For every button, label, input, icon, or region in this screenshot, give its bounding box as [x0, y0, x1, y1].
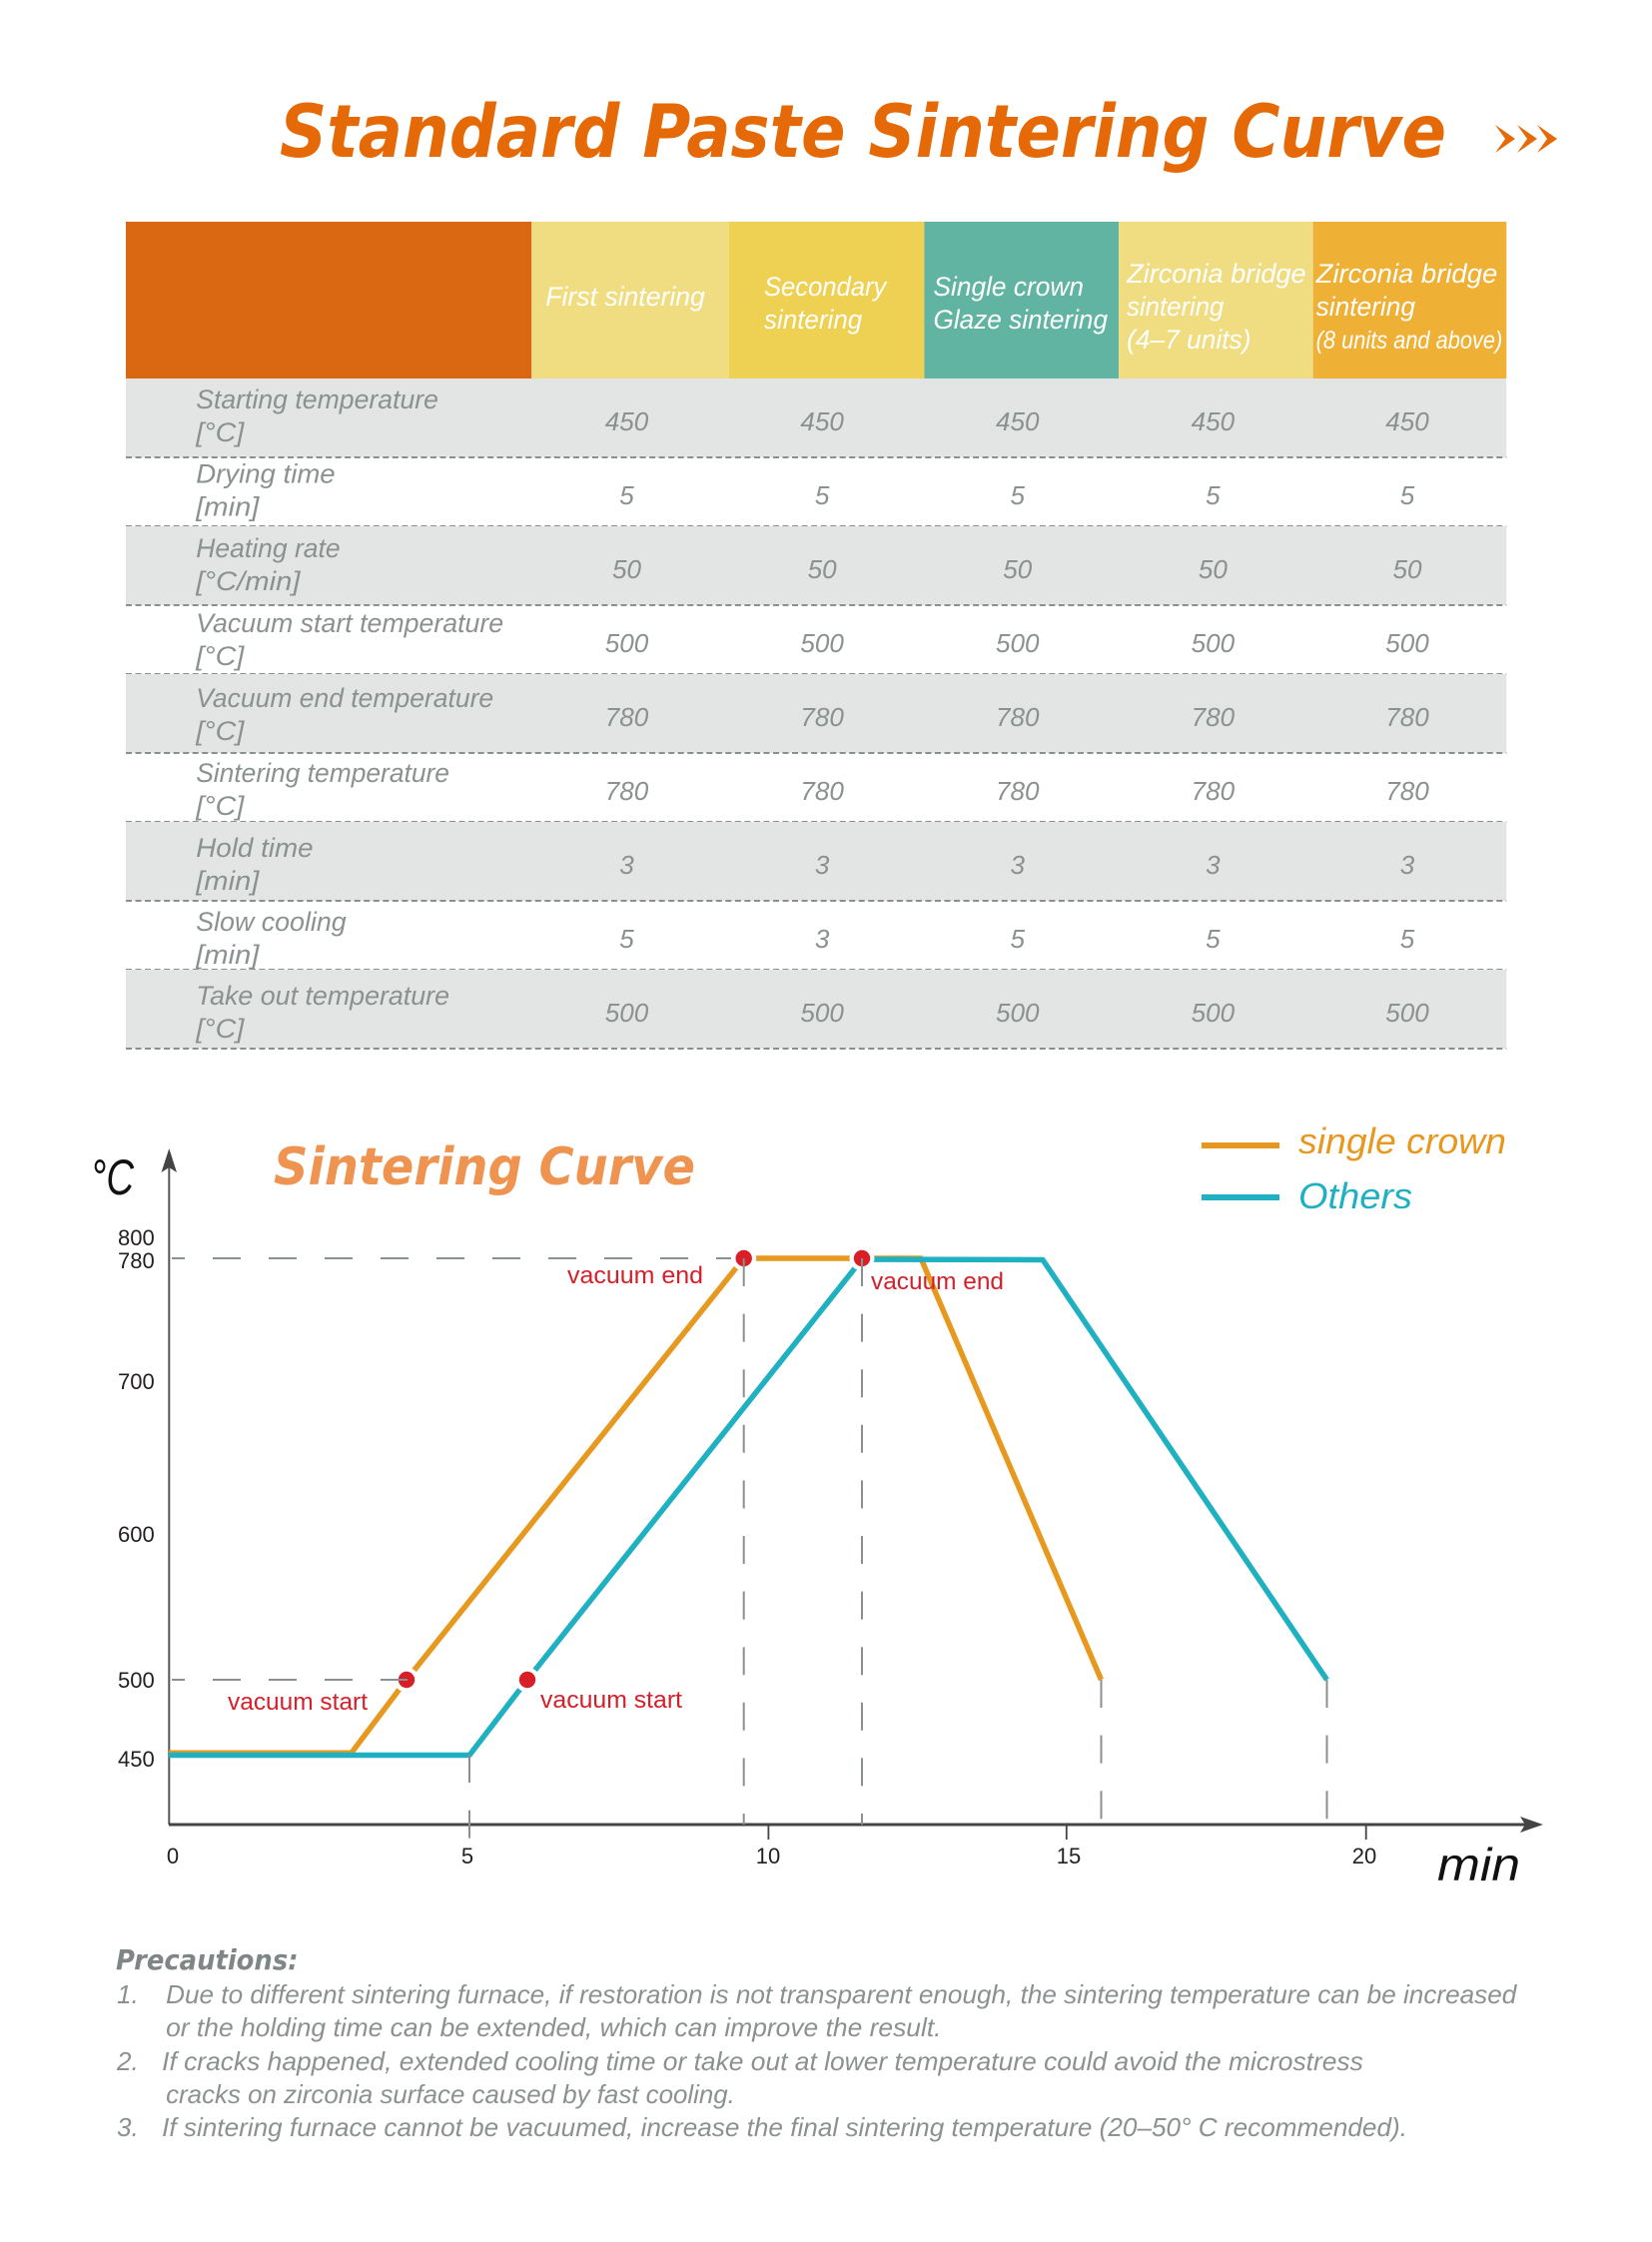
row: vacuum start temperature — [126, 608, 1506, 674]
x axis: 15 — [1057, 1844, 1081, 1868]
y axis: 500 — [118, 1668, 155, 1693]
row: hold time: 3 — [1206, 850, 1221, 880]
header cell: zirconia bridge 8 units and above: (8 units and above) — [1316, 327, 1502, 355]
label: vacuum end right: vacuum end — [871, 1268, 1004, 1295]
row: heating rate: 50 — [1003, 554, 1033, 584]
row: drying time: 5 — [1011, 480, 1026, 510]
row: take out temperature: 500 — [800, 998, 844, 1028]
chart heading: Sintering Curve — [274, 1137, 695, 1197]
header cell: zirconia bridge 8 units and above — [1313, 222, 1506, 378]
header cell: zirconia bridge 4-7 units: Zirconia bridge — [1126, 259, 1306, 289]
x axis unit: min — [1437, 1839, 1520, 1890]
row: heating rate: Heating rate — [196, 533, 341, 563]
label: vacuum start right: vacuum start — [540, 1687, 682, 1714]
curve: others — [169, 1259, 1326, 1756]
row: slow cooling: 5 — [619, 924, 634, 954]
precaution 1: 1. — [117, 1979, 139, 2009]
row: vacuum end temperature: 780 — [605, 702, 649, 732]
row: vacuum start temperature: 500 — [605, 628, 649, 658]
row: starting temperature — [126, 378, 1506, 457]
precaution 2: 2. — [116, 2046, 139, 2076]
row: slow cooling: Slow cooling — [196, 907, 347, 937]
precaution 1: or the holding time can be extended, which can improve the result. — [166, 2012, 942, 2042]
row: hold time: [min] — [195, 866, 261, 896]
vacuum markers — [399, 1250, 870, 1688]
row: sintering temperature: [°C] — [195, 791, 246, 821]
header cell: single crown glaze sintering: Glaze sintering — [933, 305, 1108, 335]
row: vacuum end temperature: Vacuum end temperature — [196, 683, 493, 713]
legend: single crown — [1298, 1121, 1506, 1161]
row: starting temperature: 450 — [996, 406, 1040, 436]
title: Standard Paste Sintering Curve — [280, 90, 1446, 175]
header cell: first sintering: First sintering — [545, 282, 705, 312]
row: vacuum start temperature: 500 — [1192, 628, 1236, 658]
row: heating rate: 50 — [1199, 554, 1228, 584]
precaution 2: cracks on zirconia surface caused by fast cooling. — [166, 2079, 735, 2109]
legend: Others — [1298, 1175, 1412, 1216]
row: hold time: 3 — [1011, 850, 1026, 880]
row: vacuum end temperature: 780 — [996, 702, 1040, 732]
y axis — [118, 1148, 177, 1825]
row: starting temperature: 450 — [605, 406, 649, 436]
header cell: zirconia bridge 8 units and above: Zirconia bridge — [1315, 259, 1497, 289]
row: take out temperature — [126, 970, 1506, 1049]
x axis: 5 — [461, 1844, 473, 1868]
row: sintering temperature — [126, 758, 1506, 822]
row: take out temperature: 500 — [1385, 998, 1429, 1028]
row: slow cooling: 5 — [1400, 924, 1415, 954]
row: sintering temperature: 780 — [1192, 776, 1236, 806]
guide lines — [172, 1258, 1326, 1842]
y axis: 600 — [118, 1522, 155, 1547]
row: take out temperature: 500 — [1192, 998, 1236, 1028]
row: slow cooling: 3 — [815, 924, 830, 954]
y axis: 450 — [118, 1747, 155, 1772]
row: heating rate: [°C/min] — [195, 566, 302, 596]
legend — [1202, 1121, 1506, 1216]
row: vacuum end temperature: 780 — [800, 702, 844, 732]
header cell: zirconia bridge 4-7 units — [1119, 222, 1313, 378]
row: vacuum start temperature: Vacuum start temperature — [196, 608, 503, 638]
row: slow cooling: 5 — [1206, 924, 1221, 954]
row: vacuum start temperature: 500 — [996, 628, 1040, 658]
row: hold time: 3 — [815, 850, 830, 880]
y axis: 780 — [118, 1248, 155, 1273]
header cell: first sintering — [531, 222, 729, 378]
row: heating rate: 50 — [612, 554, 642, 584]
row: drying time: 5 — [815, 480, 830, 510]
vacuum marker halos — [394, 1246, 875, 1692]
row: starting temperature: 450 — [1385, 406, 1429, 436]
row: sintering temperature: 780 — [605, 776, 649, 806]
panel: sintering parameter table — [126, 222, 1506, 1049]
row: starting temperature: 450 — [1192, 406, 1236, 436]
row: vacuum end temperature: [°C] — [195, 716, 246, 746]
row: sintering temperature: 780 — [1385, 776, 1429, 806]
row: hold time — [126, 822, 1506, 901]
row: starting temperature: [°C] — [195, 417, 246, 447]
header cell: secondary sintering: Secondary — [764, 272, 888, 302]
precaution 3: 3. — [117, 2112, 139, 2142]
row: hold time: 3 — [1400, 850, 1415, 880]
row: slow cooling: 5 — [1011, 924, 1026, 954]
x axis — [167, 1817, 1543, 1868]
row: drying time: [min] — [195, 492, 261, 521]
x axis: 20 — [1352, 1844, 1376, 1868]
row: take out temperature: 500 — [605, 998, 649, 1028]
row: drying time: Drying time — [196, 459, 336, 488]
row: sintering temperature: Sintering temperature — [196, 758, 449, 788]
row: sintering temperature: 780 — [800, 776, 844, 806]
row: drying time: 5 — [1400, 480, 1415, 510]
row: sintering temperature: 780 — [996, 776, 1040, 806]
row: vacuum end temperature — [126, 674, 1506, 753]
row: starting temperature: Starting temperature — [196, 384, 438, 414]
curve: single crown — [169, 1258, 1101, 1753]
row: drying time — [126, 459, 1506, 526]
row: vacuum start temperature: 500 — [1385, 628, 1429, 658]
y axis unit: °C — [91, 1149, 135, 1205]
precaution 3: If sintering furnace cannot be vacuumed, increase the final sintering temperature (20–50° C recommended). — [162, 2112, 1407, 2142]
row: vacuum end temperature: 780 — [1192, 702, 1236, 732]
header cell: blank orange — [126, 222, 531, 378]
panel: sintering curve chart — [91, 1121, 1543, 1890]
row: take out temperature: [°C] — [195, 1014, 246, 1044]
row: drying time: 5 — [1206, 480, 1221, 510]
label: vacuum start left: vacuum start — [228, 1689, 368, 1716]
row: starting temperature: 450 — [800, 406, 844, 436]
header cell: secondary sintering: sintering — [764, 305, 862, 335]
header cell: zirconia bridge 4-7 units: (4–7 units) — [1127, 325, 1250, 355]
x axis: 0 — [167, 1844, 179, 1868]
row: heating rate: 50 — [1392, 554, 1422, 584]
precaution 2 — [116, 2046, 1363, 2109]
header cell: zirconia bridge 4-7 units: sintering — [1127, 292, 1224, 322]
panel: precautions — [116, 1943, 1518, 2142]
row: vacuum end temperature: 780 — [1385, 702, 1429, 732]
header cell: secondary sintering — [729, 222, 924, 378]
row: hold time: Hold time — [196, 833, 314, 863]
row: slow cooling: [min] — [195, 940, 261, 970]
precaution 2: If cracks happened, extended cooling time or take out at lower temperature could avoid the microstress — [162, 2046, 1363, 2076]
icon: triple chevron arrows — [1495, 125, 1557, 153]
y axis: 800 — [118, 1225, 155, 1250]
precaution 1 — [117, 1979, 1518, 2042]
row: take out temperature: Take out temperature — [196, 981, 449, 1011]
header cell: single crown glaze sintering — [924, 222, 1119, 378]
row: drying time: 5 — [619, 480, 634, 510]
row: heating rate — [126, 526, 1506, 605]
y axis: 700 — [118, 1369, 155, 1394]
label: vacuum end left: vacuum end — [567, 1262, 703, 1289]
row: hold time: 3 — [619, 850, 634, 880]
row: vacuum start temperature: [°C] — [195, 641, 246, 671]
row: vacuum start temperature: 500 — [800, 628, 844, 658]
precaution 1: Due to different sintering furnace, if restoration is not transparent enough, the sintering temperature can be increased — [166, 1979, 1518, 2009]
row: heating rate: 50 — [808, 554, 837, 584]
x axis: 10 — [756, 1844, 780, 1868]
row: slow cooling — [126, 907, 1506, 970]
table header row — [126, 222, 1506, 378]
row: take out temperature: 500 — [996, 998, 1040, 1028]
precautions heading: Precautions: — [116, 1943, 299, 1976]
header cell: zirconia bridge 8 units and above: sintering — [1316, 292, 1415, 322]
header cell: single crown glaze sintering: Single crown — [933, 272, 1084, 302]
